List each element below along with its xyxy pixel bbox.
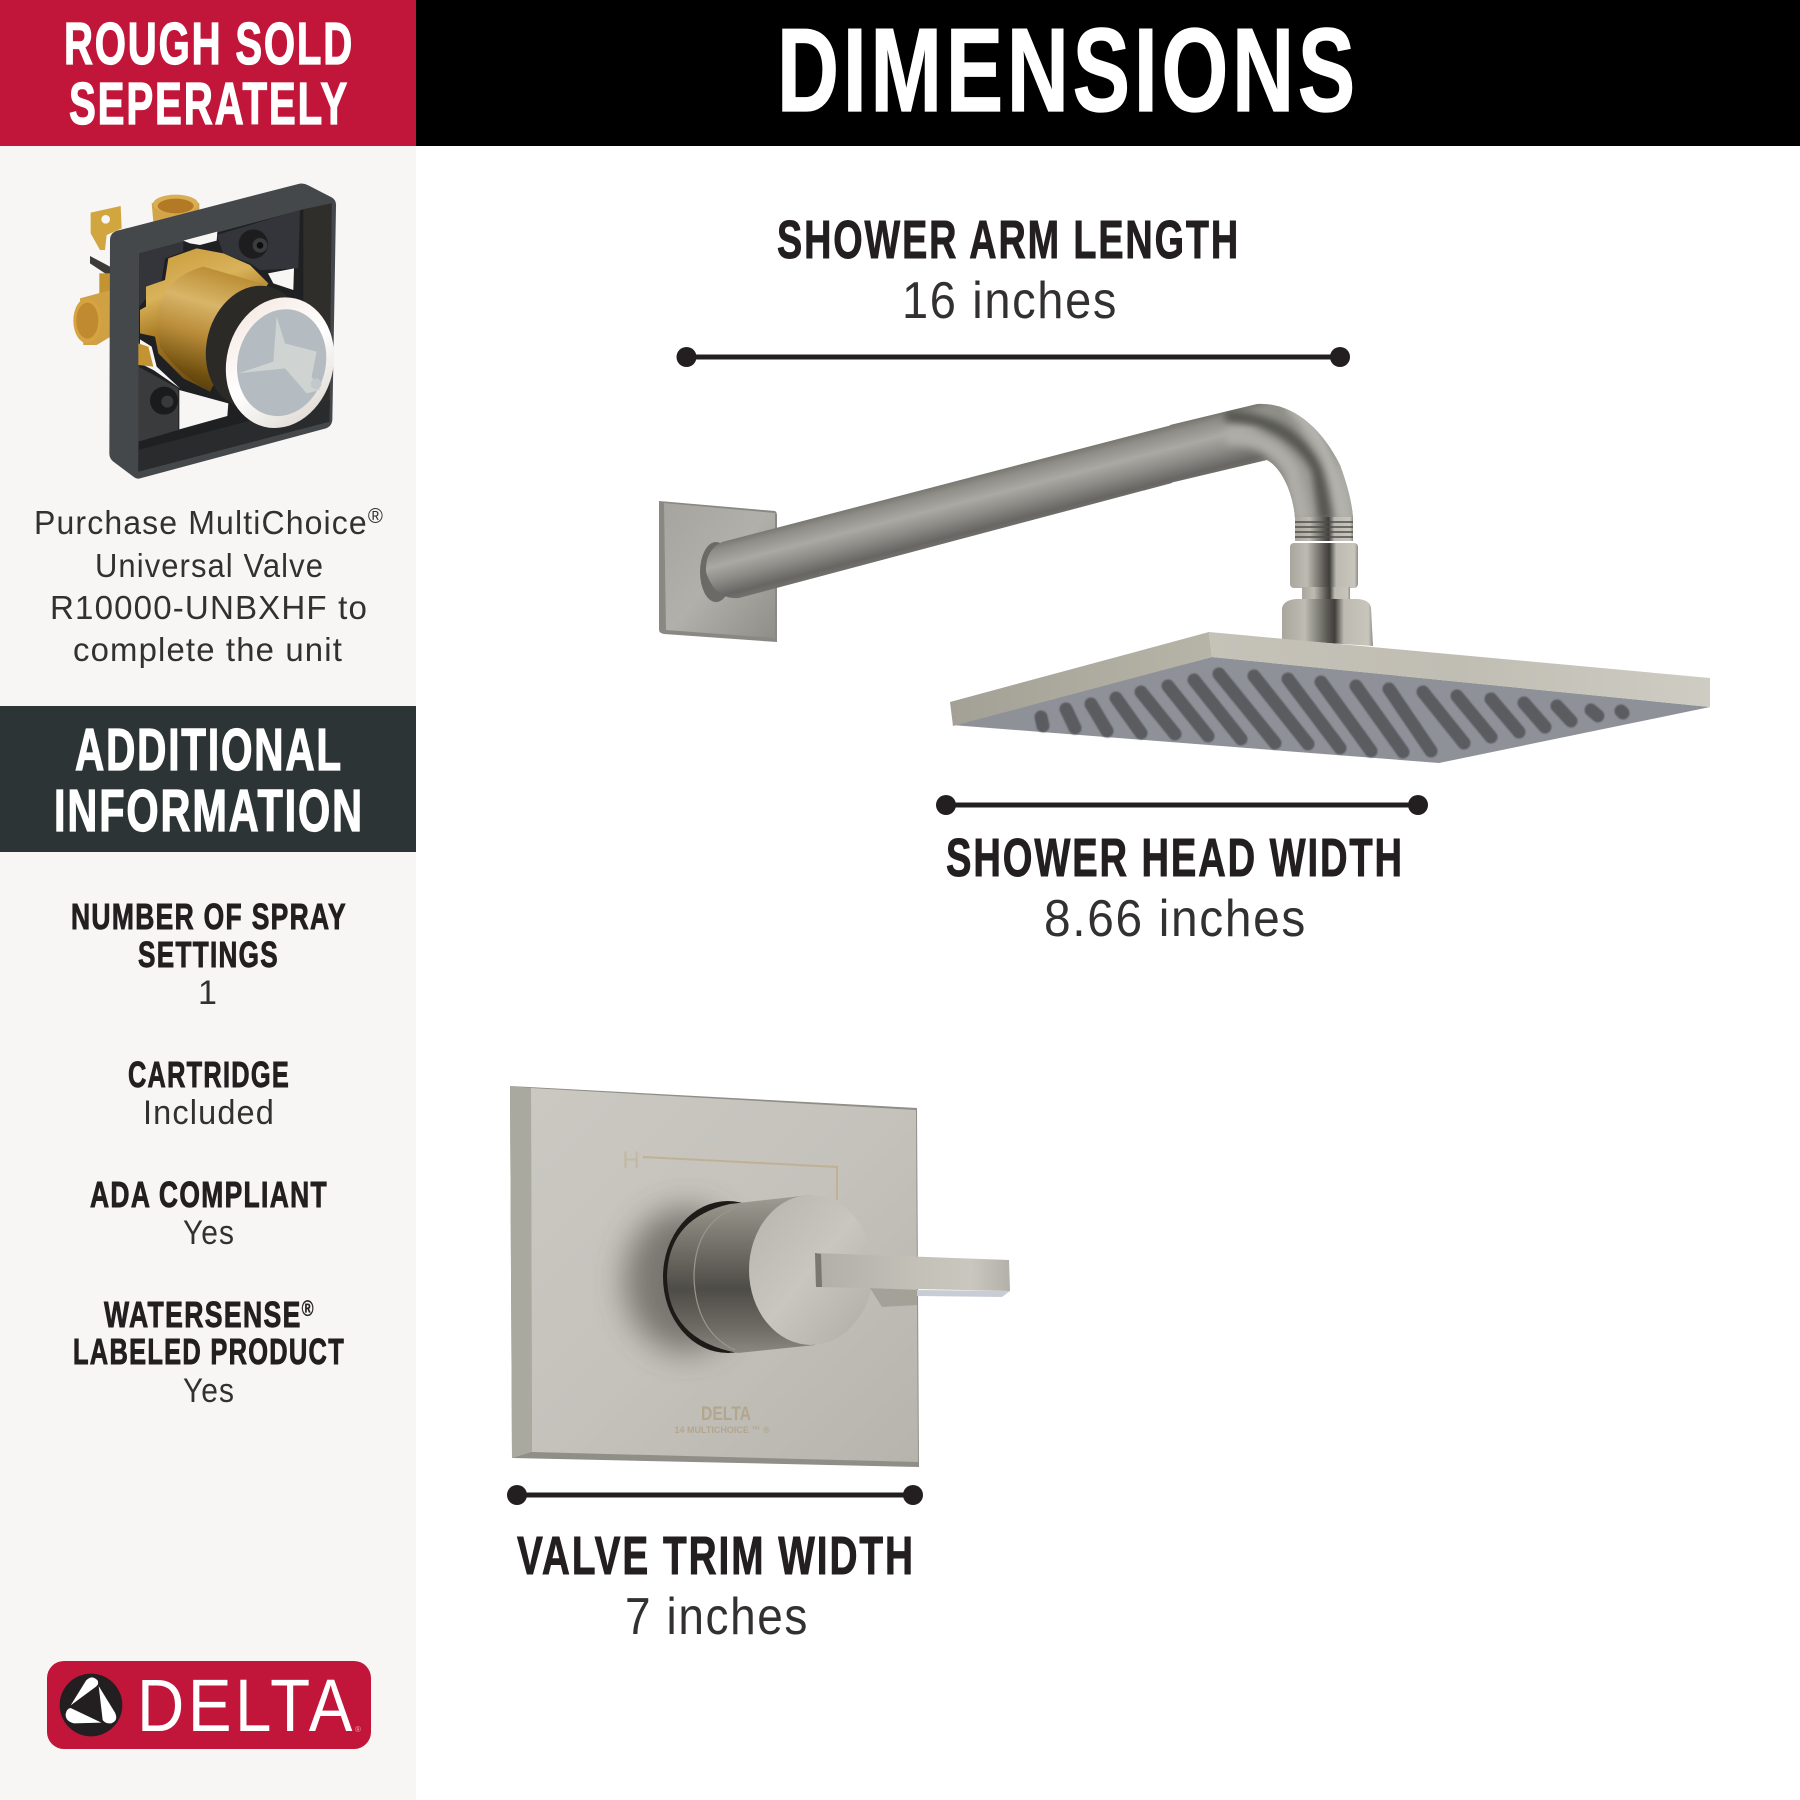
valve purchase text: ® (368, 505, 384, 528)
collar ridge (694, 1208, 735, 1350)
plate logo: DELTA (701, 1404, 751, 1425)
red banner: rough sold separately: SEPERATELY (69, 71, 349, 137)
red banner: rough sold separately: ROUGH SOLD (64, 11, 354, 77)
spec: watersense: WATERSENSE (104, 1294, 371, 1335)
header: dimensions band (416, 0, 1800, 146)
threads (1295, 517, 1353, 541)
valve purchase text: R10000-UNBXHF to (50, 589, 368, 626)
spec: cartridge: Included (143, 1094, 275, 1132)
valve trim plate (510, 1086, 1010, 1467)
arm tube (706, 425, 1172, 598)
plastic cap (226, 300, 337, 426)
header: dimensions band: DIMENSIONS (777, 4, 1359, 137)
dimension: shower arm length label (777, 210, 1240, 330)
logo mark (60, 1674, 122, 1736)
temperature mark: H (622, 1147, 640, 1174)
screw lower (150, 387, 178, 415)
valve top pipe (152, 195, 199, 222)
spec: ada compliant (90, 1174, 328, 1252)
screw upper (239, 229, 268, 259)
dimension line: valve (507, 1485, 923, 1505)
spec: ada compliant: ADA COMPLIANT (90, 1174, 328, 1215)
spray face (952, 657, 1710, 763)
temperature mark (622, 1147, 837, 1200)
spray holes (1041, 674, 1623, 752)
spec: spray settings (71, 896, 347, 1012)
valve left pipe (73, 290, 111, 345)
spec: spray settings: 1 (198, 974, 218, 1012)
upper nut (1290, 543, 1358, 588)
dimension: shower head width label: 8.66 inches (1044, 890, 1307, 948)
knob shadow (625, 1208, 745, 1352)
sidebar background (0, 0, 416, 1800)
dimension: shower head width label (946, 828, 1404, 948)
knob cylinder (667, 1195, 815, 1353)
plate body (510, 1086, 919, 1467)
frame inner back plate, lower (138, 367, 178, 442)
frame inner back plate, upper (139, 210, 300, 307)
shower arm assembly (659, 390, 1373, 646)
rain shower head (950, 632, 1710, 763)
spec: cartridge: CARTRIDGE (128, 1054, 290, 1095)
lower frame strip (138, 400, 330, 472)
brass bracket (138, 343, 153, 367)
knob face (749, 1195, 873, 1345)
mounting frame (109, 184, 336, 479)
lever handle (815, 1253, 1010, 1297)
plate logo: 14 MULTICHOICE ™ ® (674, 1425, 770, 1436)
delta logo: ® (355, 1725, 361, 1734)
spec: watersense: LABELED PRODUCT (73, 1331, 345, 1372)
plate left bevel (510, 1086, 532, 1458)
frame inner wall (138, 203, 332, 472)
additional information heading: ADDITIONAL (75, 717, 343, 783)
spec: spray settings: SETTINGS (138, 934, 279, 975)
valve purchase text: Universal Valve (95, 547, 324, 584)
left lip (950, 632, 1212, 726)
dimension: valve trim width label (517, 1526, 915, 1646)
mounting tab (90, 206, 122, 293)
knob base ring (663, 1201, 793, 1353)
dimension: valve trim width label: VALVE TRIM WIDTH (517, 1526, 915, 1586)
spec: watersense (73, 1294, 345, 1410)
right lip (1209, 632, 1710, 707)
valve purchase text: Purchase MultiChoice (34, 504, 378, 541)
dimension line: head (936, 795, 1428, 815)
background windows (140, 232, 294, 429)
black collar (193, 275, 317, 418)
spec: spray settings: NUMBER OF SPRAY (71, 896, 347, 937)
frame right wall (303, 203, 332, 423)
lower nut (1282, 599, 1373, 646)
additional information heading: INFORMATION (54, 778, 364, 844)
valve purchase text (34, 504, 384, 668)
dimension: shower arm length label: 16 inches (902, 272, 1118, 330)
flange shadow (700, 542, 732, 602)
brass cylinder (158, 267, 267, 392)
brass body (140, 248, 268, 392)
spec: ada compliant: Yes (183, 1214, 235, 1252)
valve purchase text: complete the unit (73, 631, 343, 668)
delta logo: DELTA (137, 1664, 356, 1747)
spec: cartridge (128, 1054, 290, 1132)
chrome ring (212, 286, 348, 440)
dimension: shower head width label: SHOWER HEAD WIDTH (946, 828, 1404, 888)
dimension: shower arm length label: SHOWER ARM LENGTH (777, 210, 1240, 270)
handle shadow (870, 1288, 917, 1307)
spec: watersense: ® (302, 1296, 315, 1321)
nut neck (1302, 587, 1350, 599)
red banner: rough sold separately (0, 0, 416, 146)
additional information heading (0, 706, 416, 852)
product image: rough-in valve (73, 184, 348, 479)
wall flange (659, 501, 777, 642)
spec: watersense: Yes (183, 1372, 235, 1410)
knob collar (696, 1195, 810, 1352)
plate logo (674, 1404, 770, 1436)
elbow (1170, 404, 1353, 518)
dimension: valve trim width label: 7 inches (625, 1588, 809, 1646)
plate face (531, 1088, 918, 1462)
dimension line: arm (676, 347, 1350, 367)
delta logo (47, 1661, 371, 1749)
